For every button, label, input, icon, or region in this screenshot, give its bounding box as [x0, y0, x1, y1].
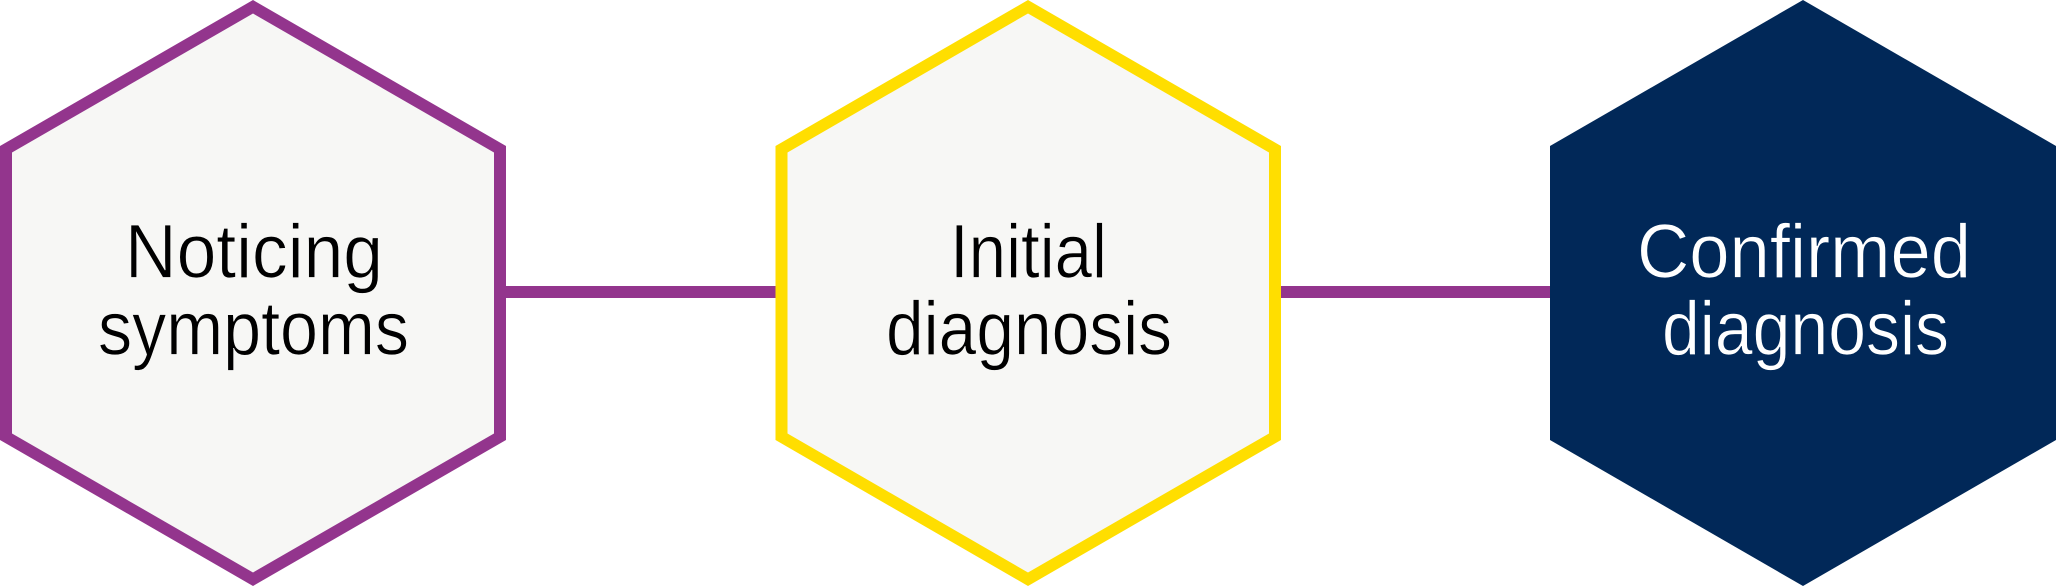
connector: symptoms to initial diagnosis	[500, 286, 782, 298]
label: initial diagnosis: Initial	[950, 209, 1107, 294]
label: confirmed diagnosis	[1637, 209, 1971, 371]
panel: noticing symptoms hexagon	[0, 0, 506, 586]
label: initial diagnosis	[886, 209, 1172, 371]
label: noticing symptoms: symptoms	[98, 286, 409, 371]
panel: confirmed diagnosis hexagon	[1550, 0, 2056, 586]
panel: initial diagnosis hexagon	[776, 0, 1281, 586]
label: initial diagnosis: diagnosis	[886, 286, 1172, 371]
label: noticing symptoms: Noticing	[125, 209, 383, 294]
label: confirmed diagnosis: diagnosis	[1662, 286, 1949, 371]
connector: initial to confirmed diagnosis	[1275, 286, 1555, 298]
label: confirmed diagnosis: Confirmed	[1637, 209, 1971, 294]
label: noticing symptoms	[98, 209, 409, 371]
